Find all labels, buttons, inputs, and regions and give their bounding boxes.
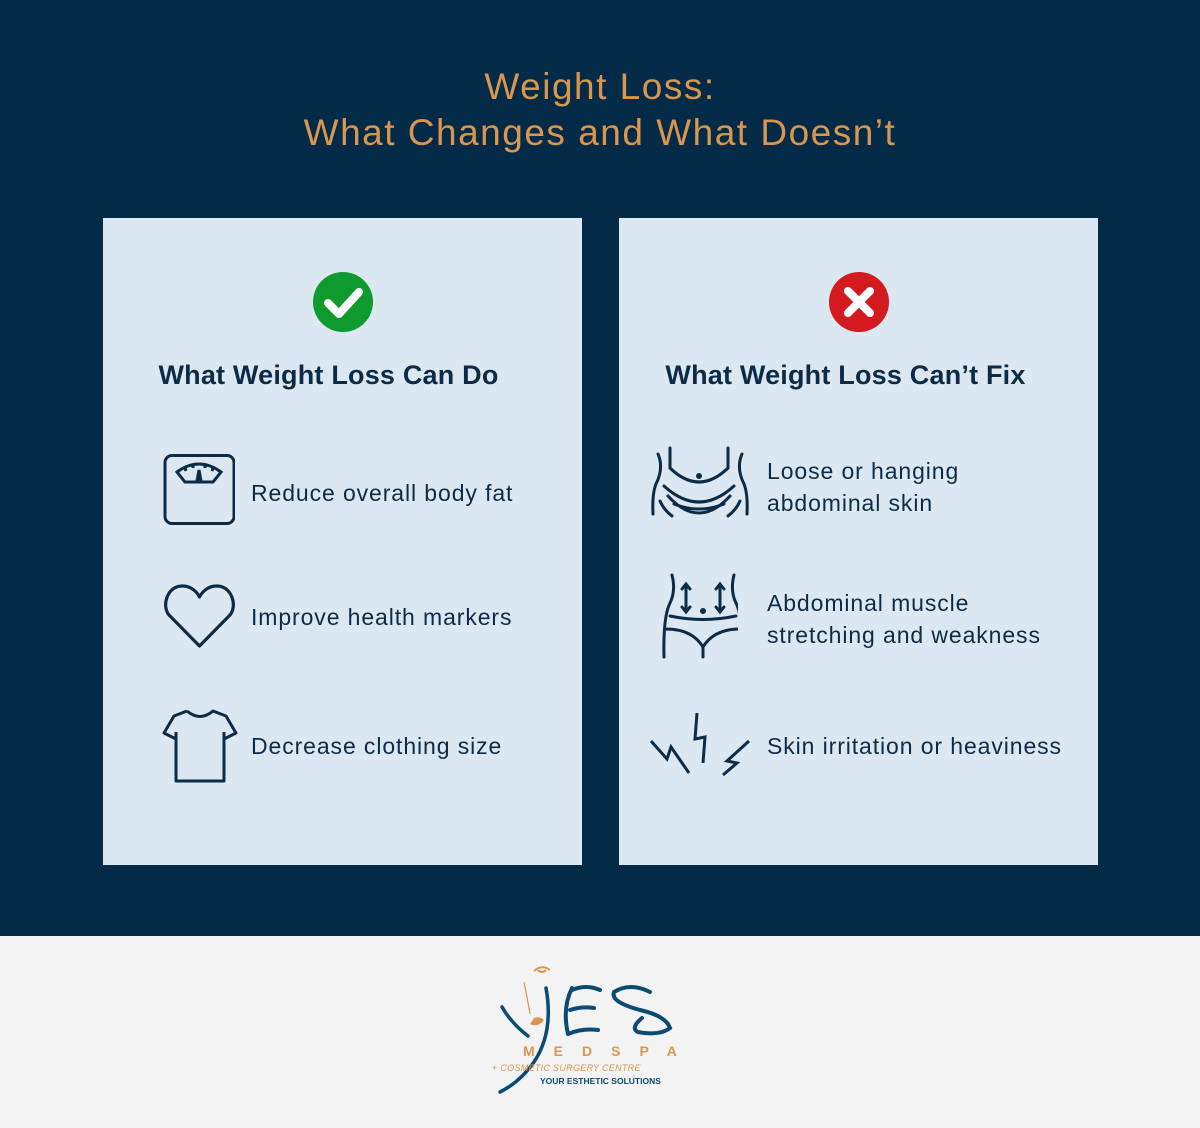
icon: scale	[164, 454, 235, 525]
text: muscle stretching: stretching and weakness	[767, 622, 1041, 648]
text: reduce fat: Reduce overall body fat	[251, 480, 513, 506]
icon: abdominal muscle	[662, 574, 738, 658]
logo	[492, 966, 696, 1094]
logo: YOUR ESTHETIC SOLUTIONS	[540, 1076, 661, 1086]
text: muscle stretching: Abdominal muscle	[767, 590, 969, 616]
panel: what weight loss can't fix	[619, 218, 1098, 865]
heading: can do: What Weight Loss Can Do	[158, 360, 499, 390]
icon: green check	[313, 272, 373, 332]
text: clothing size: Decrease clothing size	[251, 733, 502, 759]
panel: what weight loss can do	[103, 218, 582, 865]
icon: t-shirt	[162, 710, 238, 782]
title	[304, 66, 896, 153]
title: Weight Loss:	[484, 66, 716, 107]
icon: irritation zigzags	[650, 712, 750, 776]
heading: can't fix: What Weight Loss Can’t Fix	[665, 360, 1026, 390]
text: loose skin: abdominal skin	[767, 490, 933, 516]
icon: red x	[829, 272, 889, 332]
title: What Changes and What Doesn’t	[304, 112, 896, 153]
text: health markers: Improve health markers	[251, 604, 512, 630]
logo: MEDSPA	[523, 1043, 696, 1059]
text: loose skin	[767, 458, 959, 516]
icon: heart	[164, 584, 235, 648]
icon: loose abdominal skin	[651, 446, 749, 518]
text: loose skin: Loose or hanging	[767, 458, 959, 484]
text: muscle stretching	[767, 590, 1041, 648]
text: skin irritation: Skin irritation or heaviness	[767, 733, 1062, 759]
logo: + COSMETIC SURGERY CENTRE	[492, 1063, 641, 1073]
